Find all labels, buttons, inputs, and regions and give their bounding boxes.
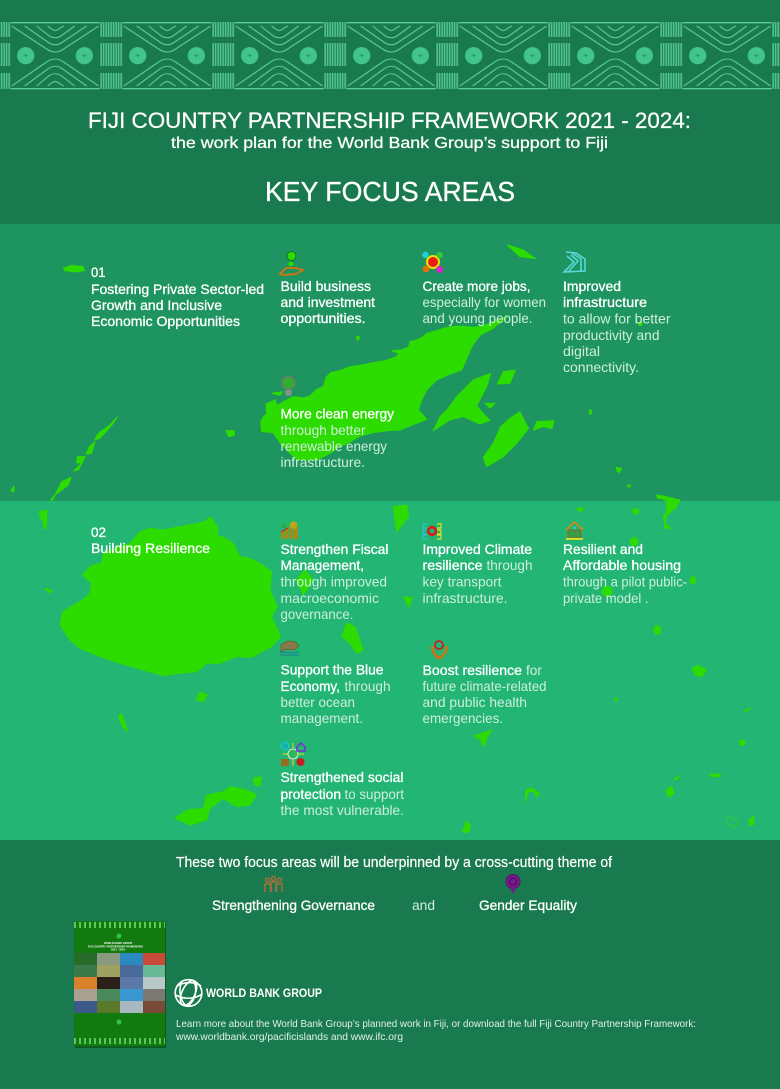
heading: focus area 01: 01 — [91, 265, 106, 280]
text: more clean energy: More clean energy — [280, 406, 394, 422]
text: boost resilience: emergencies. — [422, 711, 503, 726]
heading: key focus areas: KEY FOCUS AREAS — [265, 176, 515, 207]
text: boost resilience: and public health — [422, 695, 527, 710]
text: more clean energy: through better — [280, 423, 366, 438]
text: strengthen fiscal management: Strengthen Fiscal — [280, 542, 388, 557]
text: resilient and affordable housing: through a pilot public- — [563, 574, 687, 590]
text: build business — [280, 279, 375, 326]
icon: social protection network — [281, 742, 305, 766]
heading: focus area 02 — [91, 525, 210, 556]
panel: focus area 1 background — [0, 224, 780, 501]
report cover thumbnail: 2021 - 2024 — [111, 948, 125, 952]
text: support the blue economy: through — [344, 679, 390, 694]
icon: fish over waves — [280, 641, 299, 655]
report cover thumbnail: WORLD BANK GROUP — [104, 941, 133, 945]
heading: focus area 02: Building Resilience — [91, 541, 210, 556]
text: improved climate resilience: infrastructure. — [422, 591, 508, 606]
text: more clean energy: renewable energy — [280, 439, 387, 454]
label: gender equality: Gender Equality — [479, 897, 577, 913]
icon: jobs network — [422, 252, 443, 273]
text: support the blue economy: Support the Blue — [280, 662, 384, 678]
text: build business: opportunities. — [280, 311, 366, 326]
text: boost resilience: Boost resilience — [422, 663, 522, 678]
report cover thumbnail: FIJI COUNTRY PARTNERSHIP FRAMEWORK — [88, 944, 143, 948]
text: strengthened social protection: Strengthened social — [280, 770, 404, 785]
text: improved infrastructure: to allow for better — [563, 312, 671, 326]
logo: World Bank Group: WORLD BANK GROUP — [206, 986, 322, 1000]
panel: footer background — [0, 840, 780, 1089]
map: Vanua Levu and northern islands — [261, 245, 554, 467]
heading: focus area 01: Fostering Private Sector-led — [91, 282, 264, 297]
label: strengthening governance: Strengthening Governance — [212, 897, 375, 913]
text: improved infrastructure: digital — [563, 344, 600, 359]
text: improved climate resilience: resilience — [422, 558, 482, 573]
text: more clean energy: infrastructure. — [280, 455, 365, 470]
text: improved climate resilience — [422, 542, 532, 606]
text: improved infrastructure: connectivity. — [563, 360, 639, 375]
icon: hand with plant — [280, 252, 303, 275]
text: resilient and affordable housing: Resilient and — [563, 542, 643, 557]
text: strengthen fiscal management: Management, — [280, 558, 364, 573]
text: improved climate resilience: key transport — [422, 574, 502, 590]
text: resilient and affordable housing: Affordable housing — [563, 558, 681, 573]
heading: focus area 01 — [91, 265, 264, 329]
icon: fiscal chart — [281, 521, 298, 539]
text: boost resilience — [422, 663, 546, 726]
text: strengthened social protection: to support — [344, 787, 404, 802]
text: cross-cutting intro: These two focus areas will be underpinned by a cross-cutting theme of — [176, 855, 613, 871]
icon: light bulb — [282, 376, 295, 396]
text: strengthen fiscal management: through improved — [280, 574, 387, 590]
text: learn more — [175, 1018, 696, 1043]
text: support the blue economy — [280, 662, 390, 726]
icon: road — [564, 252, 585, 272]
icon: climate transport gear — [423, 524, 441, 539]
text: improved climate resilience: Improved Climate — [422, 542, 532, 557]
text: more clean energy — [280, 406, 394, 470]
text: strengthened social protection: protection — [280, 787, 341, 802]
map: western island chain — [11, 265, 235, 529]
text: create more jobs: and young people. — [422, 311, 532, 326]
heading: focus area 02: 02 — [91, 525, 106, 540]
text: build business: Build business — [280, 279, 371, 294]
text: improved infrastructure: Improved — [563, 279, 621, 294]
text: support the blue economy: better ocean — [280, 695, 355, 710]
text: learn more: www.worldbank.org/pacificislands and www.ifc.org — [175, 1031, 403, 1043]
header background — [0, 0, 780, 224]
heading: focus area 01: Economic Opportunities — [91, 314, 240, 329]
panel: focus area 2 background — [0, 501, 780, 840]
text: strengthen fiscal management: macroeconomic — [280, 591, 379, 606]
text: learn more: Learn more about the World Bank Group’s planned work in Fiji, or download the full Fiji Country Partnership Framework: — [176, 1018, 696, 1030]
label: and: and — [412, 897, 435, 913]
title: FIJI COUNTRY PARTNERSHIP FRAMEWORK 2021 - 2024: — [88, 108, 691, 133]
icon: gender symbol — [506, 874, 520, 893]
map: eastern islets — [589, 323, 680, 509]
text: strengthen fiscal management — [280, 542, 388, 622]
text: build business: and investment — [280, 295, 375, 310]
text: boost resilience: future climate-related — [422, 679, 546, 694]
text: create more jobs: especially for women — [422, 295, 546, 310]
map: eastern Lau islands — [404, 500, 754, 833]
text: support the blue economy: Economy, — [280, 679, 340, 694]
text: resilient and affordable housing: private model . — [563, 591, 648, 606]
icon: house — [566, 522, 583, 540]
text: strengthened social protection: the most vulnerable. — [280, 803, 404, 818]
text: strengthen fiscal management: governance. — [280, 607, 354, 622]
title — [88, 108, 691, 152]
text: strengthened social protection — [280, 770, 404, 818]
icon: people group — [265, 876, 282, 892]
heading: focus area 01: Growth and Inclusive — [91, 298, 222, 313]
text: improved infrastructure: infrastructure — [563, 295, 647, 310]
text: improved infrastructure: productivity and — [563, 328, 660, 343]
text: improved infrastructure — [563, 279, 671, 375]
subtitle: the work plan for the World Bank Group’s support to Fiji — [171, 135, 608, 152]
text: improved climate resilience: through — [486, 558, 532, 573]
text: create more jobs: Create more jobs, — [422, 279, 530, 294]
text: boost resilience: for — [526, 663, 542, 678]
text: support the blue economy: management. — [280, 711, 363, 726]
text: resilient and affordable housing — [563, 542, 687, 606]
icon: hands holding heart — [432, 641, 447, 658]
logo: World Bank Group — [175, 978, 322, 1008]
report cover thumbnail — [74, 921, 166, 1048]
decorative tapa pattern banner — [0, 22, 780, 90]
map: Viti Levu and southern islands — [40, 505, 412, 825]
text: create more jobs — [422, 279, 546, 326]
